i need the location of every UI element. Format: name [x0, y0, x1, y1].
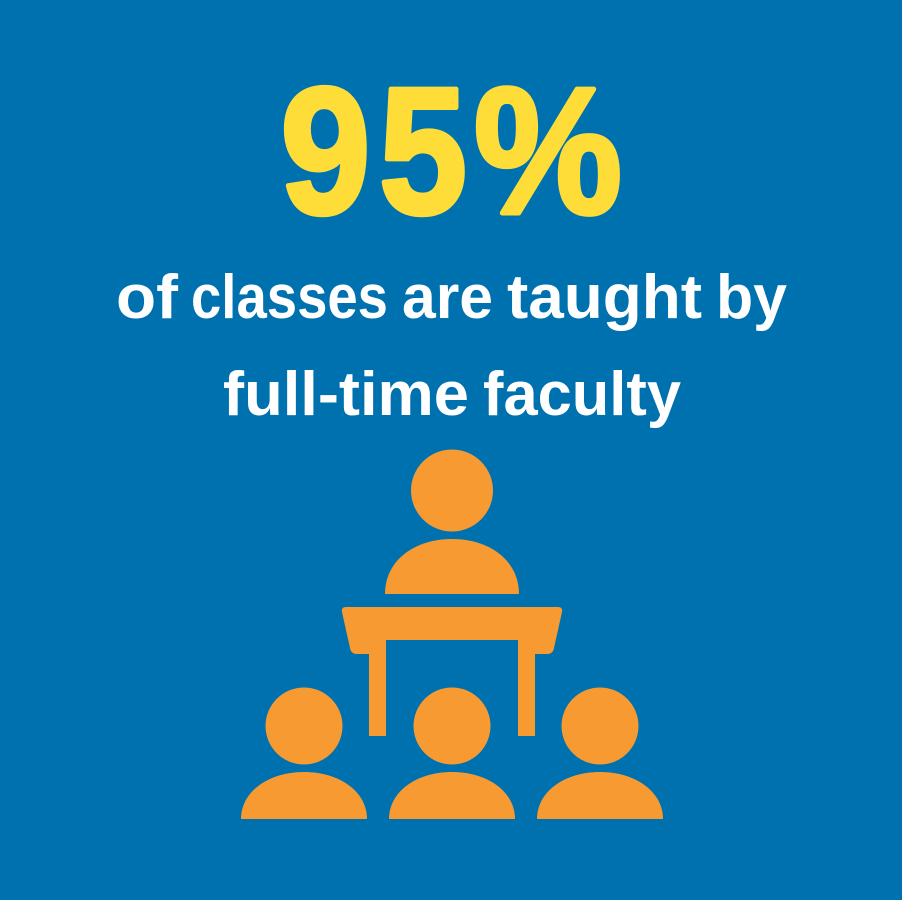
description line 1: are	[402, 263, 493, 332]
icon: student center	[389, 688, 515, 819]
description line 1: taught	[507, 263, 702, 332]
icon: teacher	[385, 450, 519, 594]
big statistic 95%: %	[474, 51, 622, 252]
big statistic 95%: 9	[280, 51, 370, 252]
icon: lectern	[342, 607, 562, 736]
description line 2: full-time	[223, 360, 469, 429]
icon: student left	[241, 688, 367, 819]
description line 1: of	[116, 263, 178, 332]
description line 2	[223, 360, 682, 429]
icon: teacher at lectern with three students	[241, 450, 663, 819]
description line 1	[116, 263, 788, 332]
description line 1: classes	[191, 263, 388, 332]
big statistic 95%: 5	[379, 51, 467, 252]
description line 2: faculty	[483, 360, 682, 429]
icon: student right	[537, 688, 663, 819]
description line 1: by	[716, 263, 788, 332]
big statistic 95%	[280, 51, 622, 252]
